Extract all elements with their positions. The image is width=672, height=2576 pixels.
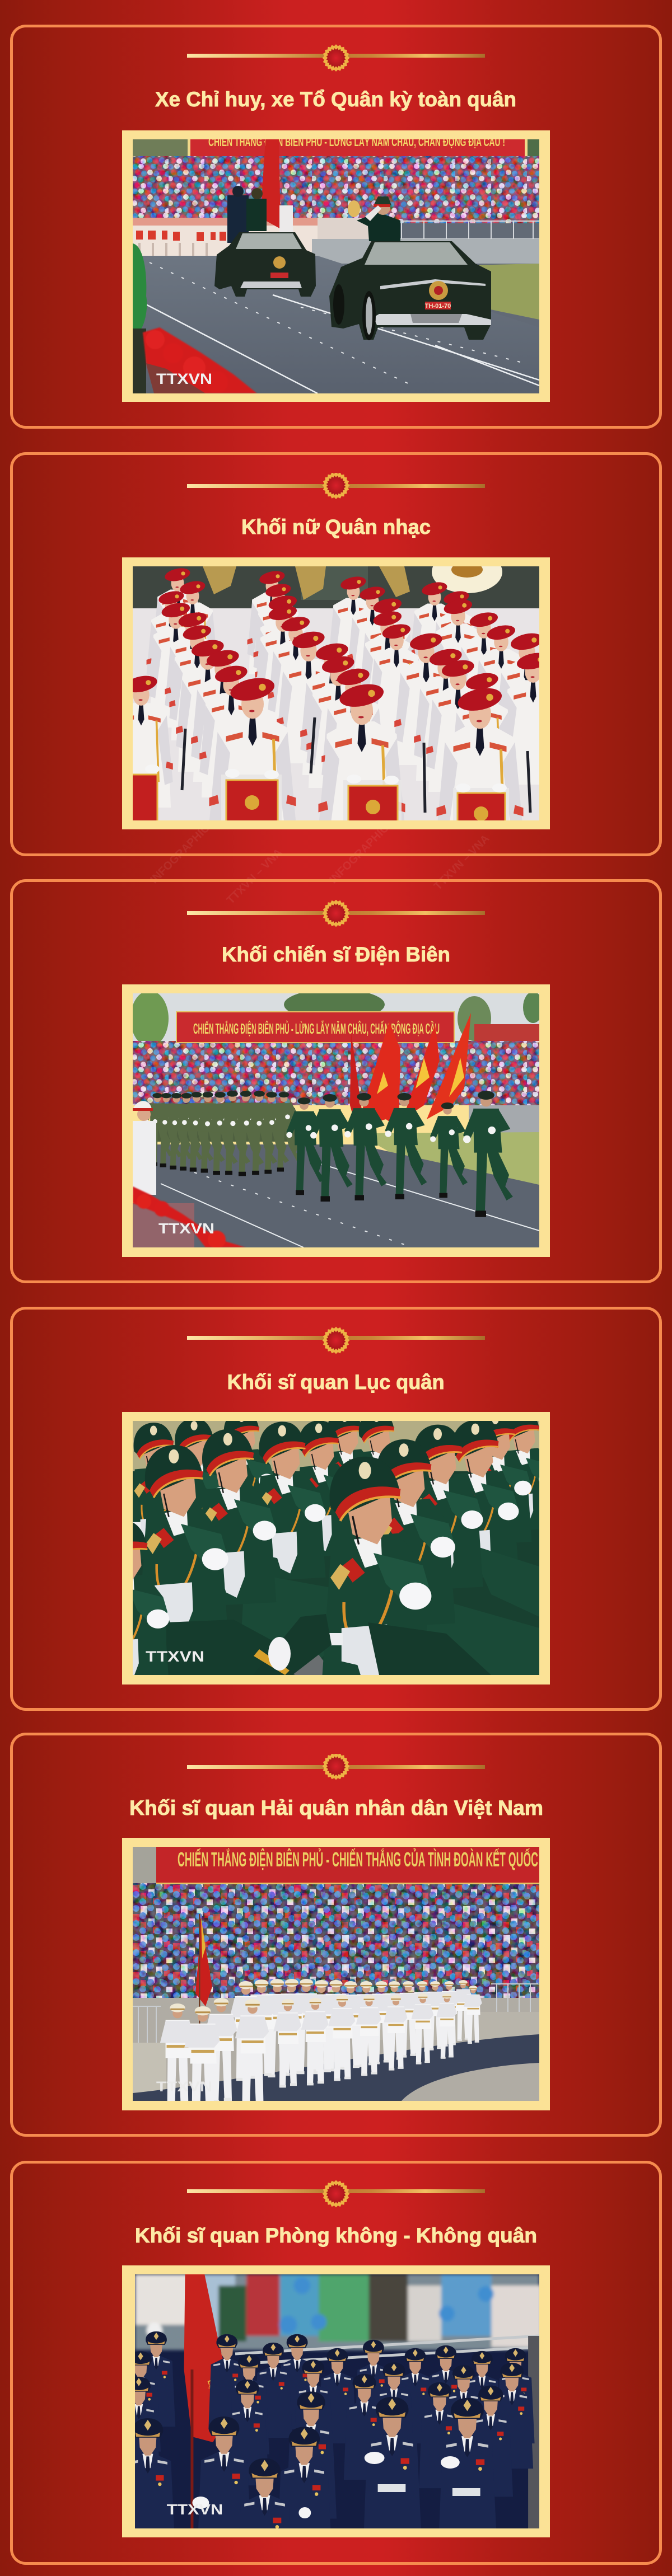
ornament divider <box>187 44 485 72</box>
sousaphone <box>432 551 502 593</box>
photo: female band <box>133 566 539 820</box>
back rows <box>118 2331 535 2497</box>
ornament divider <box>187 473 485 499</box>
white gloves <box>192 2452 460 2518</box>
olive troops <box>144 1091 301 1176</box>
flag <box>195 1917 212 2006</box>
photo: command cars <box>133 139 539 393</box>
photo: Dien Bien soldiers <box>133 993 539 1247</box>
white guard <box>133 1101 156 1195</box>
road <box>133 256 539 393</box>
middle row officers <box>138 1425 483 1645</box>
heading: Xe Chỉ huy, xe Tổ Quân kỳ toàn quân <box>155 88 516 111</box>
TTXVN mark: TTXVN <box>146 1648 204 1665</box>
TTXVN mark: TTXVN <box>167 2502 223 2518</box>
flag on rear car <box>260 139 281 229</box>
grass <box>301 264 539 320</box>
sailors block <box>160 1979 482 2120</box>
road <box>133 1144 539 1247</box>
foreground leg <box>253 1614 491 1675</box>
drums <box>130 764 509 823</box>
panel: Xe Chỉ huy <box>10 25 662 429</box>
panel: Khối chiến sĩ Điện Biên <box>10 879 662 1283</box>
flags <box>350 1013 471 1133</box>
panel: Khối nữ Quân nhạc <box>10 452 662 856</box>
heading: Khối nữ Quân nhạc <box>241 515 431 538</box>
ornament divider <box>187 1754 485 1780</box>
banner <box>156 1847 539 1884</box>
TTXVN mark: TTXVN <box>156 370 212 387</box>
TTXVN mark: TTXVN <box>158 1220 214 1237</box>
watermark: INFOGRAPHICS <box>148 817 217 886</box>
foreground officer <box>320 1457 431 1701</box>
left greenery <box>133 243 147 393</box>
rear car <box>214 232 316 297</box>
ornament divider <box>187 2180 485 2207</box>
photo frame <box>122 2265 550 2537</box>
banner <box>176 1012 454 1043</box>
lead soldiers <box>286 1091 513 1217</box>
photo frame <box>122 984 550 1257</box>
heading: Khối sĩ quan Phòng không - Không quân <box>135 2224 537 2247</box>
red flag <box>184 2274 234 2528</box>
red flag: LỆNH <box>206 2378 222 2401</box>
fence <box>396 221 539 239</box>
watermark: TTXVN – VNA <box>225 846 284 907</box>
grass <box>357 1132 539 1185</box>
panel: Khối sĩ quan Hải quân <box>10 1733 662 2137</box>
red flowers <box>143 327 257 393</box>
watermark: TTXVN – VNA <box>432 832 492 893</box>
rear car crew <box>227 186 293 243</box>
panel: Khối sĩ quan Lục quân <box>10 1307 662 1711</box>
back row officers <box>128 1410 555 1582</box>
red flowers <box>133 1186 246 1249</box>
commander <box>348 196 400 241</box>
photo: army officers <box>133 1421 539 1675</box>
front car: TH-01-70 <box>425 303 451 309</box>
photo frame <box>122 1838 550 2110</box>
clarinets <box>182 717 530 813</box>
crowd background <box>135 2274 542 2350</box>
photo: air defence officers <box>135 2274 539 2528</box>
heading: Khối sĩ quan Hải quân nhân dân Việt Nam <box>129 1796 543 1819</box>
marching band <box>133 218 374 258</box>
ornament divider <box>187 900 485 927</box>
photo frame <box>122 130 550 402</box>
TTXVN mark: TTXVN <box>156 2079 212 2095</box>
fence <box>133 1984 538 2045</box>
road <box>133 2034 539 2101</box>
front car <box>329 241 491 340</box>
front rows <box>121 2391 497 2576</box>
marching legs <box>239 1544 539 1675</box>
photo frame <box>122 1412 550 1685</box>
photo frame <box>122 557 550 829</box>
watermark: INFOGRAPHICS <box>327 817 396 886</box>
band members <box>109 566 565 868</box>
photo: navy officers <box>133 1847 539 2101</box>
heading: Khối chiến sĩ Điện Biên <box>222 943 450 966</box>
ornament divider <box>187 1326 485 1354</box>
heading: Khối sĩ quan Lục quân <box>227 1370 445 1393</box>
brass instruments <box>203 566 410 600</box>
fence <box>235 2336 539 2364</box>
left front officer <box>91 1521 169 1693</box>
banner <box>188 134 528 156</box>
panel: Khối sĩ quan Phòng không - Không quân <box>10 2161 662 2565</box>
